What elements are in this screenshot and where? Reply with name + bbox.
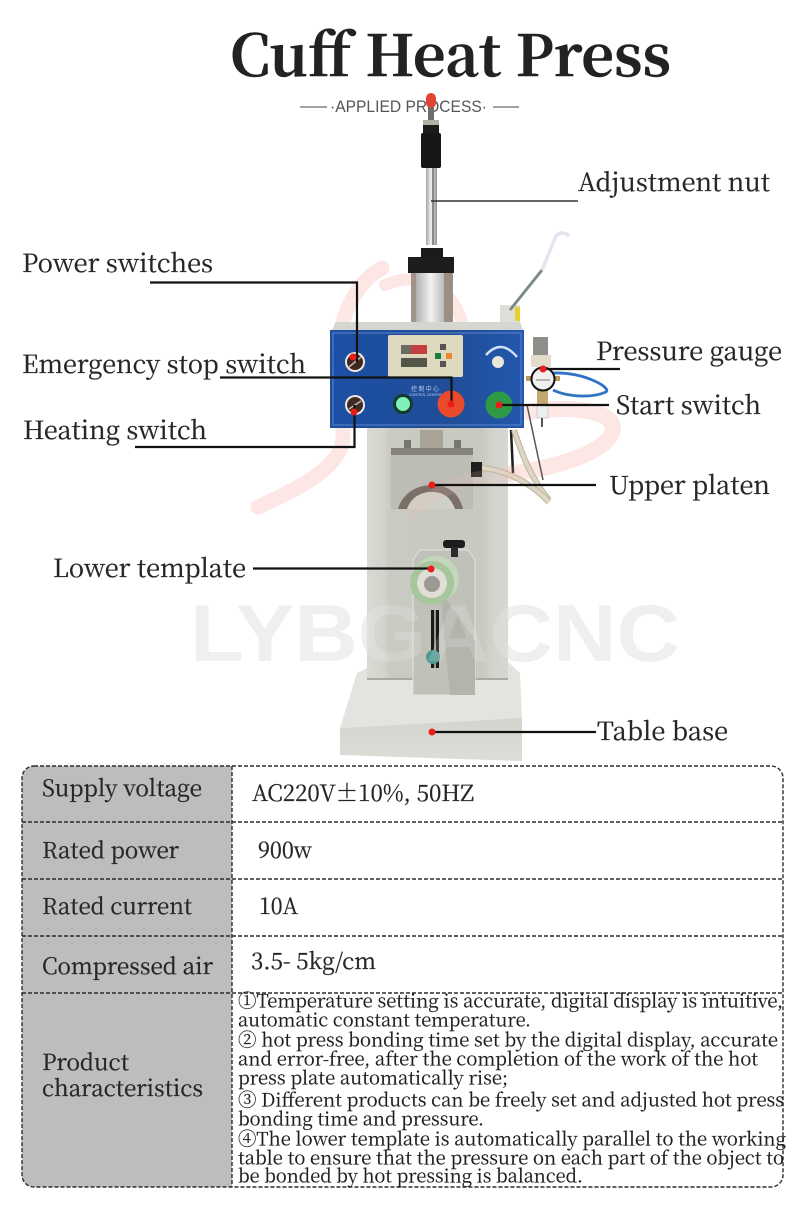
callout line: start switch bbox=[499, 404, 609, 406]
power rotary switch bbox=[345, 352, 365, 372]
specification table bbox=[22, 766, 786, 1188]
panel caption: CONTROL CENTER bbox=[409, 393, 442, 397]
product characteristics text: bonding time and pressure. bbox=[238, 1106, 484, 1132]
row: rated power bbox=[42, 833, 312, 865]
column bbox=[367, 428, 508, 680]
table base bbox=[340, 662, 522, 761]
indicator light bbox=[393, 394, 413, 414]
label: upper platen: Upper platen bbox=[609, 466, 770, 502]
product characteristics text: ④The lower template is automatically parallel to the working bbox=[238, 1126, 786, 1152]
watermark overlay on column: LYBGACNC bbox=[190, 589, 680, 679]
panel caption bbox=[409, 384, 442, 397]
machine illustration bbox=[190, 93, 680, 761]
lower template bbox=[410, 540, 475, 695]
callout line: emergency stop switch bbox=[220, 378, 452, 404]
product characteristics text: ② hot press bonding time set by the digital display, accurate bbox=[238, 1026, 778, 1052]
callout line: pressure gauge bbox=[543, 368, 620, 370]
table grid bbox=[22, 766, 783, 1187]
label: lower template: Lower template bbox=[53, 549, 246, 585]
adjustment rod and knob bbox=[421, 93, 441, 245]
product characteristics text: and error-free, after the completion of the work of the hot bbox=[238, 1046, 758, 1072]
red dots bbox=[350, 354, 546, 736]
cables bbox=[482, 405, 549, 502]
start button bbox=[486, 392, 512, 418]
callout line: table base bbox=[432, 731, 596, 733]
row: compressed air: 3.5- 5kg/cm bbox=[251, 944, 376, 976]
air lever bbox=[500, 233, 569, 323]
title: Cuff Heat Press bbox=[230, 11, 671, 93]
cylinder bbox=[408, 248, 454, 327]
product characteristics text: ③ Different products can be freely set and adjusted hot press bbox=[238, 1086, 784, 1112]
row: compressed air: Compressed air bbox=[42, 949, 214, 981]
pressure dial bbox=[486, 347, 517, 368]
product characteristics text: ①Temperature setting is accurate, digital display is intuitive, bbox=[238, 988, 783, 1014]
callout lines and dots bbox=[135, 201, 620, 736]
label column background bbox=[22, 766, 232, 1187]
heating rotary switch bbox=[345, 395, 365, 415]
label: heating switch: Heating switch bbox=[23, 411, 207, 447]
callout line: adjustment nut bbox=[431, 200, 578, 202]
label: emergency stop switch: Emergency stop switch bbox=[22, 345, 306, 381]
callout line: upper platen bbox=[432, 484, 596, 486]
row: supply voltage: Supply voltage bbox=[42, 771, 202, 803]
row: rated power: Rated power bbox=[42, 833, 180, 865]
label: start switch: Start switch bbox=[616, 386, 761, 422]
row: compressed air bbox=[42, 944, 376, 981]
label: pressure gauge: Pressure gauge bbox=[596, 332, 782, 368]
row: supply voltage bbox=[42, 771, 474, 808]
upper platen bbox=[391, 430, 482, 509]
row heading: product characteristics bbox=[42, 1045, 203, 1103]
product characteristics text: press plate automatically rise; bbox=[238, 1064, 508, 1090]
pressure regulator bbox=[526, 337, 607, 427]
label: table base: Table base bbox=[597, 712, 728, 748]
watermark: red logo bbox=[258, 268, 613, 510]
watermark: LYBGACNC: LYBGACNC bbox=[190, 589, 680, 679]
row: rated current: Rated current bbox=[42, 889, 192, 921]
row: supply voltage: AC220V±10%, 50HZ bbox=[252, 776, 474, 808]
row: rated current bbox=[42, 889, 298, 921]
row: rated current: 10A bbox=[259, 889, 298, 921]
panel caption: 控 制 中 心 bbox=[411, 384, 439, 393]
row: rated power: 900w bbox=[258, 833, 312, 865]
product characteristics text: automatic constant temperature. bbox=[238, 1006, 531, 1032]
product characteristics text: be bonded by hot pressing is balanced. bbox=[238, 1162, 583, 1188]
callout line: lower template bbox=[253, 567, 431, 570]
label: adjustment nut: Adjustment nut bbox=[578, 163, 770, 199]
label: power switches: Power switches bbox=[22, 244, 213, 280]
callout line: heating switch bbox=[135, 405, 354, 447]
emergency stop button bbox=[438, 390, 464, 418]
product characteristics text: table to ensure that the pressure on each part of the object to bbox=[238, 1144, 784, 1170]
row heading: product characteristics: characteristics bbox=[42, 1071, 203, 1103]
product characteristics text bbox=[238, 988, 786, 1188]
subtitle: applied process: ·APPLIED PROCESS· bbox=[330, 98, 487, 116]
row heading: product characteristics: Product bbox=[42, 1045, 129, 1077]
control panel bbox=[330, 322, 524, 428]
watermark overlay on column bbox=[190, 445, 680, 679]
callout line: power switches bbox=[150, 282, 357, 362]
digital display bbox=[388, 335, 463, 377]
